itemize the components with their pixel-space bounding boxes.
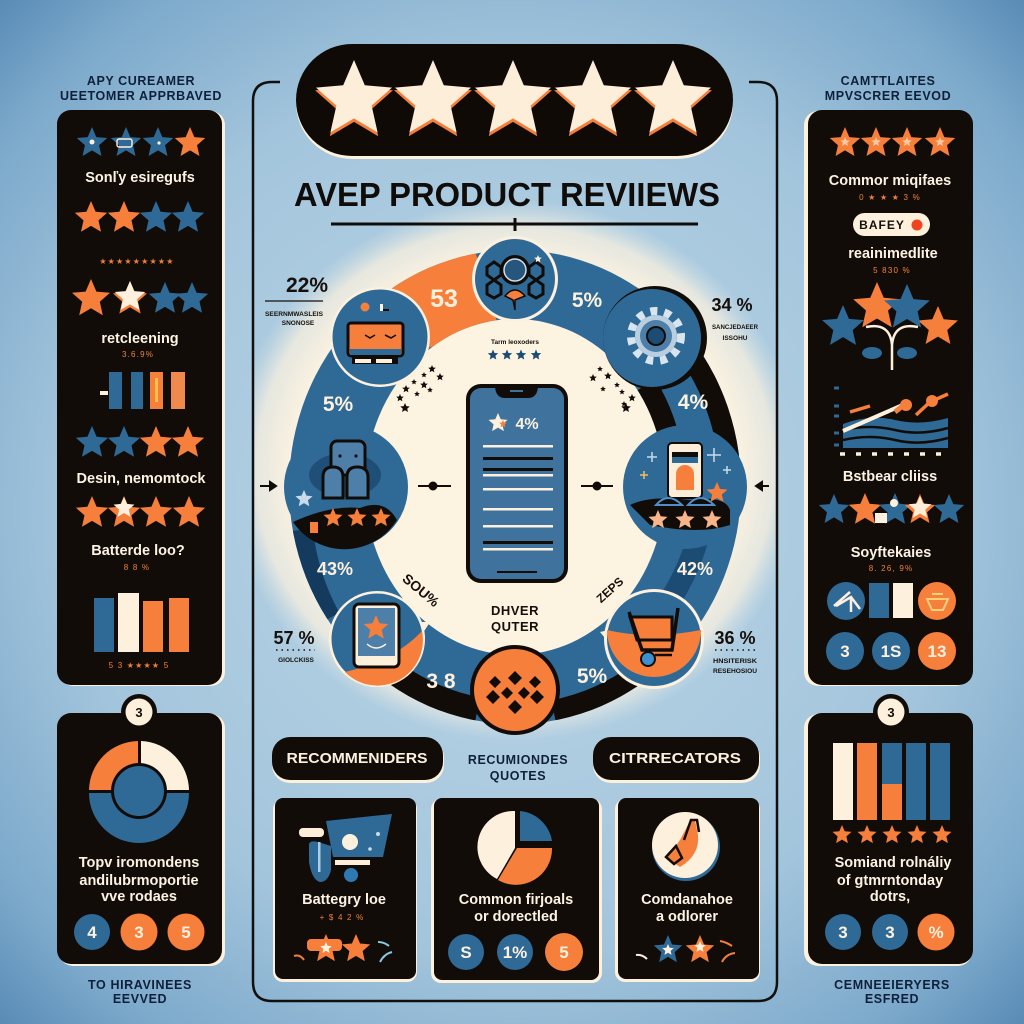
badge — [873, 694, 909, 730]
phone — [466, 384, 568, 583]
five star rating — [315, 60, 712, 136]
centre caption: DHVER — [491, 603, 539, 618]
icon: bag — [652, 812, 720, 881]
score circles: 3 — [838, 923, 848, 942]
label: Desin, nemomtock — [77, 471, 206, 487]
phone rating value: 4% — [515, 416, 539, 433]
callout: 22% — [265, 274, 328, 327]
left heading — [60, 74, 222, 103]
star row 1 — [77, 127, 205, 156]
callout: 22%: SNONOSE — [282, 320, 315, 327]
badge — [121, 694, 157, 730]
icon row — [827, 582, 956, 620]
star cluster with plant — [822, 282, 958, 370]
ring values: 3 8 — [426, 670, 456, 693]
card: battery — [273, 798, 417, 982]
score circles: 4 — [87, 923, 97, 942]
label: Commor miqifaes — [829, 173, 951, 189]
left footer heading: TO HIRAVINEES — [88, 978, 192, 992]
frame around centre panel — [253, 82, 777, 1001]
icon: orange badge — [470, 645, 560, 735]
badge: 3 — [135, 705, 143, 720]
description: of gtmrntonday — [837, 873, 943, 889]
panel: lower left — [57, 694, 225, 966]
label: Soyftekaies — [851, 545, 931, 561]
callout: 22%: SEERNMWASLEIS — [265, 311, 324, 318]
recommended quotes heading: RECUMIONDES — [468, 753, 568, 767]
callout: 57% — [273, 628, 315, 664]
ring values: 42% — [677, 559, 713, 579]
ring values: 5% — [577, 665, 607, 688]
label: Common firjoals — [459, 892, 573, 908]
card: companion — [615, 798, 760, 982]
wave chart — [834, 388, 951, 454]
description: andilubrmoportie — [79, 873, 199, 889]
badge: 3 — [887, 705, 895, 720]
callout: 36%: RESEHOSIOU — [713, 668, 757, 675]
description — [79, 855, 199, 905]
rotated label right: ZEPS — [594, 574, 626, 606]
label: retcleening — [101, 331, 179, 347]
callout: 22%: 22% — [286, 274, 328, 297]
value: 8 8 % — [124, 563, 150, 572]
bar chart — [94, 593, 189, 652]
score circles: 3 — [840, 642, 850, 661]
right heading: MPVSCRER EEVOD — [825, 89, 951, 103]
callout: 34%: 34 % — [711, 295, 753, 315]
star row — [832, 825, 952, 843]
left footer heading: EEVVED — [113, 992, 167, 1006]
score circles: S — [460, 943, 472, 962]
phone rating value — [488, 413, 539, 433]
label: Battegry loe — [302, 892, 386, 908]
label: a odlorer — [656, 909, 718, 925]
right heading: CAMTTLAITES — [841, 74, 935, 88]
description: vve rodaes — [101, 889, 177, 905]
scattered stars left — [396, 365, 444, 412]
cream centre glow — [254, 160, 776, 750]
callout: 36%: 36 % — [714, 628, 756, 648]
star row 4 — [76, 426, 204, 457]
icon: left group with stars — [284, 425, 408, 549]
score circles: % — [928, 923, 944, 942]
label — [641, 892, 733, 925]
right footer heading: CEMNEEIERYERS — [834, 978, 950, 992]
icon: gear — [603, 286, 707, 390]
recommenders button: RECOMMENIDERS — [286, 750, 428, 767]
callout: 57%: 57 % — [273, 628, 315, 648]
ring values: 5% — [323, 393, 353, 416]
bar chart — [100, 372, 185, 409]
ring values: 5% — [572, 289, 602, 312]
label: Sonľy esiregufs — [85, 170, 195, 186]
description: Somiand rolnáliy — [835, 855, 951, 871]
value: + $ 4 2 % — [320, 913, 364, 922]
caption with stars — [488, 339, 541, 359]
tiny rating: ★★★★★★★★★ — [99, 257, 175, 266]
mixed star row — [819, 493, 964, 524]
ring values: 53 — [430, 285, 458, 313]
description — [835, 855, 951, 905]
value: 5 830 % — [873, 266, 911, 275]
circular review ring — [290, 252, 740, 722]
label: Batterde loo? — [91, 543, 185, 559]
right footer heading — [834, 978, 950, 1006]
description: Topv iromondens — [79, 855, 199, 871]
ring values: 43% — [317, 559, 353, 579]
icon: cart — [299, 814, 392, 882]
label — [459, 892, 573, 925]
icon: monitor — [330, 287, 430, 387]
title: AVEP PRODUCT REVIIEWS — [294, 176, 720, 213]
star row 3 — [72, 279, 208, 315]
panel: lower right — [804, 694, 973, 966]
donut chart — [89, 741, 189, 843]
score circles: 13 — [928, 642, 946, 661]
citations button: CITRRECATORS — [609, 750, 741, 767]
score circles — [448, 933, 583, 971]
score circles: 1% — [503, 943, 527, 962]
callout: 34%: ISSOHU — [723, 335, 748, 342]
description: dotrs, — [870, 889, 910, 905]
star row — [830, 127, 955, 156]
title divider — [331, 218, 698, 231]
left heading: UEETOMER APPRBAVED — [60, 89, 222, 103]
citations button — [593, 737, 760, 783]
icon: shopping cart — [600, 589, 704, 689]
connector arrows — [260, 482, 769, 490]
ring values: 4% — [678, 391, 708, 414]
score circles: 1S — [881, 642, 901, 661]
icon: right device with stars — [623, 425, 747, 549]
score circles — [74, 914, 204, 950]
score circles — [825, 914, 954, 950]
rating banner — [296, 44, 733, 159]
label: Comdanahoe — [641, 892, 733, 908]
callout: 36%: HNSITERISK — [713, 658, 757, 665]
score circles: 3 — [885, 923, 895, 942]
stars — [294, 934, 392, 962]
recommended quotes heading: QUOTES — [490, 769, 546, 783]
caption with stars: Tarm leoxoders — [491, 339, 539, 346]
value: 8. 26, 9% — [869, 564, 913, 573]
star row 2 — [75, 201, 204, 232]
left footer heading — [88, 978, 192, 1006]
value: 3.6.9% — [122, 350, 154, 359]
panel: right column — [804, 110, 973, 686]
star row 5 — [76, 496, 205, 527]
scattered stars right — [589, 366, 636, 412]
right heading — [825, 74, 951, 103]
panel: left column — [57, 110, 225, 686]
stars — [636, 935, 735, 962]
safety pill: BAFEY — [859, 218, 905, 232]
callout: 57%: GIOLCKISS — [278, 657, 315, 664]
pie chart — [477, 811, 552, 885]
score circles: 3 — [134, 923, 144, 942]
bar chart — [833, 743, 950, 820]
centre caption: QUTER — [491, 619, 539, 634]
left heading: APY CUREAMER — [87, 74, 195, 88]
right footer heading: ESFRED — [865, 992, 919, 1006]
centre caption — [491, 603, 539, 634]
label: reainimedlite — [848, 246, 938, 262]
score circles: 5 — [181, 923, 191, 942]
icon: search top circle — [472, 236, 558, 322]
score circles: 5 — [559, 943, 569, 962]
phone review lines — [483, 445, 553, 550]
value: 0 ★ ★ ★ 3 % — [859, 193, 921, 202]
callout: 34%: SANCJEDAEER — [712, 324, 758, 331]
label: or dorectled — [474, 909, 558, 925]
label: Bstbear cliiss — [843, 469, 937, 485]
callout: 34% — [711, 295, 758, 342]
rotated label left: SOU% — [399, 570, 443, 610]
card: common — [431, 798, 602, 983]
recommended quotes heading — [468, 753, 568, 783]
recommenders button — [272, 737, 444, 783]
icon: tablet — [329, 591, 430, 687]
tiny rating: 5 3 ★★★★ 5 — [109, 661, 169, 670]
ring values — [317, 285, 713, 693]
score circles — [826, 632, 956, 670]
safety pill — [853, 213, 930, 236]
callout: 36% — [713, 628, 757, 675]
